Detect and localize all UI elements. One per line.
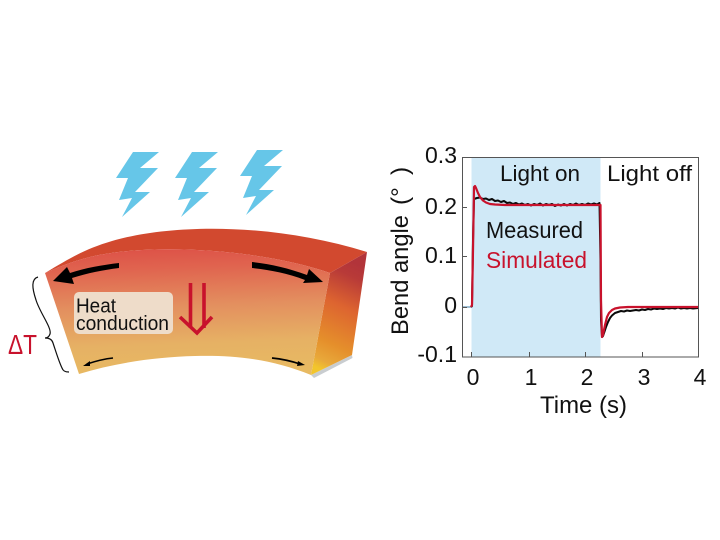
arrow: bottom left small xyxy=(83,358,113,366)
illustration: bent heated slab xyxy=(45,229,367,378)
simulated curve xyxy=(471,186,698,337)
y axis tick labels: 0 xyxy=(444,292,457,318)
legend: measured: Measured xyxy=(486,217,583,243)
y axis tick labels xyxy=(417,142,457,367)
slab shadow edge xyxy=(311,355,352,378)
y axis title: ( xyxy=(387,196,414,205)
legend: simulated: Simulated xyxy=(486,247,587,273)
icon: lightning bolt 2 xyxy=(175,152,218,217)
x axis tick labels: 4 xyxy=(694,364,707,390)
x axis title: Time (s) xyxy=(540,392,627,419)
y axis title: ° xyxy=(387,187,414,197)
x axis tick labels xyxy=(467,364,707,390)
arrow: bottom right small xyxy=(272,358,305,366)
icon: lightning bolt 1 xyxy=(116,152,159,217)
arrow: red heat flow double arrow xyxy=(180,283,212,333)
y axis tick labels: -0.1 xyxy=(417,341,457,367)
arrow: top right expansion xyxy=(252,262,323,283)
slab right side face xyxy=(311,252,367,375)
x axis tick labels: 2 xyxy=(581,364,593,390)
slab top face xyxy=(45,229,367,273)
chart: bend angle vs time xyxy=(387,142,707,419)
icon: lightning bolt 3 xyxy=(240,150,283,215)
brace: slab thickness xyxy=(33,277,69,372)
y axis title: ) xyxy=(387,167,414,175)
y axis tick labels: 0.3 xyxy=(425,142,457,168)
plot frame and ticks xyxy=(462,158,698,357)
slab front face xyxy=(45,249,330,375)
heat conduction label xyxy=(74,292,173,335)
label: light off: Light off xyxy=(607,161,693,186)
heat conduction label: conduction xyxy=(76,313,169,335)
arrow: top left expansion xyxy=(53,263,119,284)
label: light on: Light on xyxy=(500,161,580,186)
label: delta T: ΔT xyxy=(8,329,37,360)
x axis tick labels: 0 xyxy=(467,364,479,390)
y axis tick labels: 0.1 xyxy=(425,242,457,268)
y axis tick labels: 0.2 xyxy=(425,193,457,219)
x axis tick labels: 3 xyxy=(638,364,650,390)
icon: lightning bolts xyxy=(116,150,283,217)
x axis tick labels: 1 xyxy=(525,364,537,390)
baseline before light xyxy=(462,306,472,308)
light on shaded band xyxy=(472,157,600,357)
measured curve xyxy=(471,198,698,337)
y axis title: Bend angle xyxy=(387,215,414,335)
heat conduction label: Heat xyxy=(76,296,116,318)
